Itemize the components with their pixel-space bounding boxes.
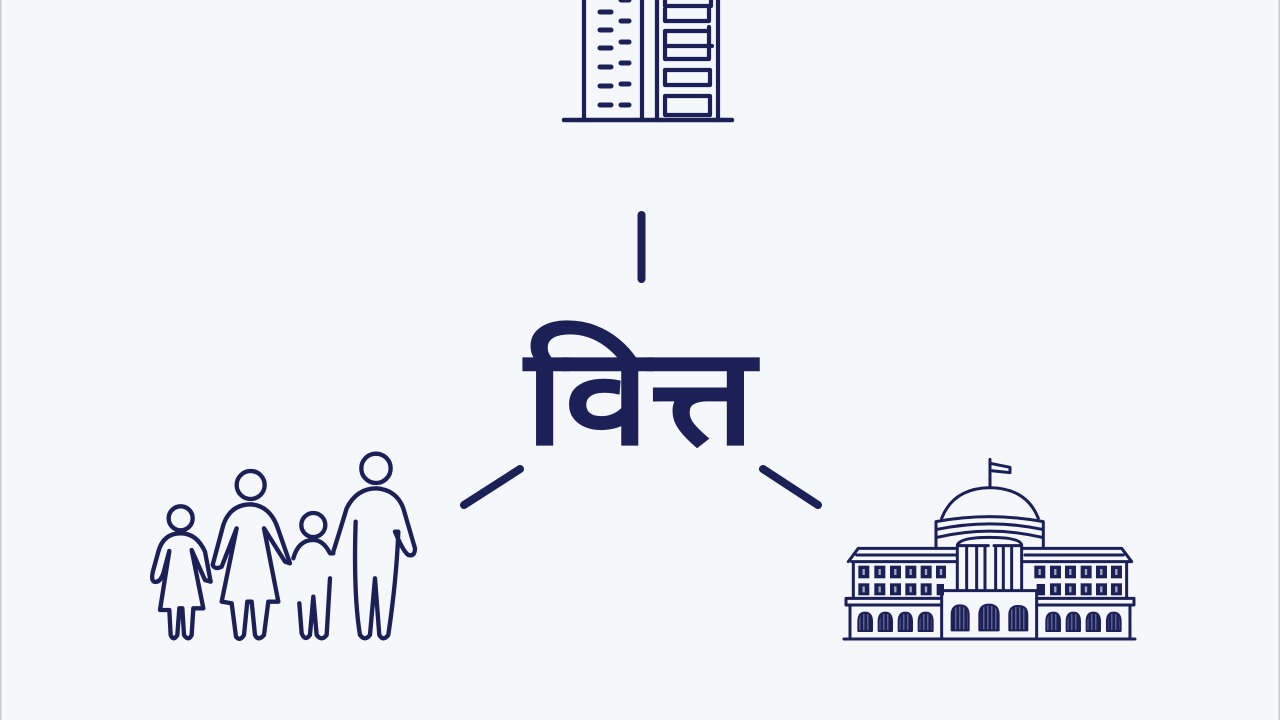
icon: office tower (564, 0, 732, 120)
boy (293, 513, 333, 638)
icon: family (152, 454, 415, 639)
icon: government building (844, 459, 1135, 639)
connector: top (638, 215, 646, 279)
connector: right (763, 469, 818, 505)
man (333, 454, 415, 638)
window highlights (864, 569, 1116, 592)
upper windows (858, 566, 1122, 595)
central block (942, 591, 1037, 638)
flag (990, 459, 1010, 487)
dome (942, 488, 1038, 518)
connector: left (464, 469, 520, 505)
woman (213, 471, 290, 639)
drum (936, 517, 1043, 547)
girl (152, 506, 211, 638)
title: वित्त (522, 320, 760, 473)
portico (957, 537, 1022, 590)
arched windows (858, 605, 1121, 631)
upper wings (848, 548, 1132, 598)
belt course (846, 598, 1134, 638)
base line (844, 634, 1135, 643)
